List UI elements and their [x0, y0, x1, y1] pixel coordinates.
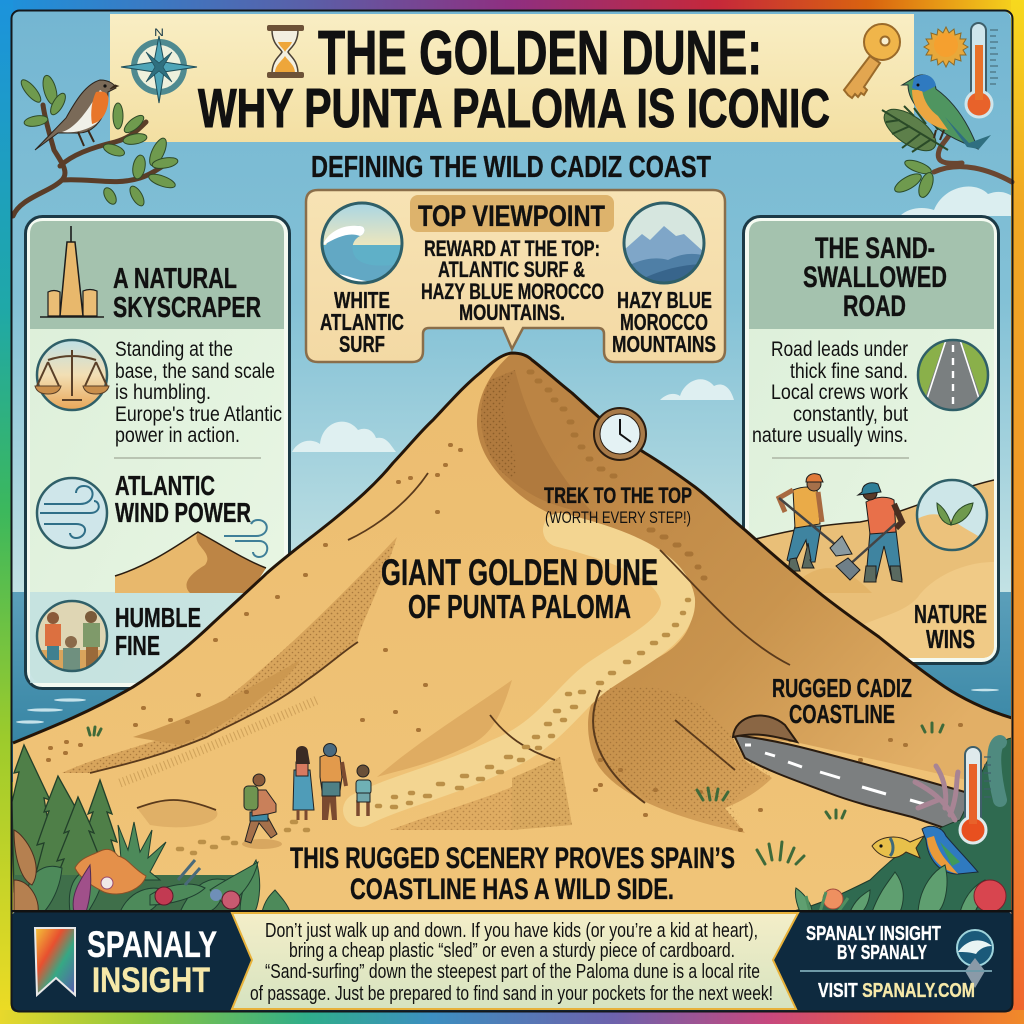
panel: the sand-swallowed road — [744, 216, 998, 664]
people on the dune — [242, 744, 371, 849]
tip text: bring a cheap plastic “sled” or even a sturdy piece of cardboard. — [289, 939, 735, 962]
icon: sand tower — [40, 226, 104, 317]
dune shadow face — [477, 353, 1012, 833]
small bird — [922, 826, 978, 874]
label: hazy blue morocco mountains: HAZY BLUE — [617, 287, 712, 313]
foliage left — [12, 745, 290, 912]
dune silhouette outline — [13, 353, 1012, 743]
tip scroll — [232, 913, 798, 1009]
text: standing at the base: Standing at the — [115, 337, 233, 361]
icon: mini dune — [115, 520, 267, 593]
tip text — [250, 919, 773, 1005]
pine trees — [12, 745, 119, 892]
ground plants — [14, 822, 290, 912]
tropical leaves — [14, 830, 38, 912]
tip text: of passage. Just be prepared to find sand in your pockets for the next week! — [250, 982, 773, 1005]
man — [320, 744, 346, 820]
seaweed — [994, 742, 1000, 800]
icon: sun — [924, 27, 968, 67]
icon: wave — [320, 203, 404, 294]
label: white atlantic surf: SURF — [339, 331, 385, 357]
panel: top viewpoint callout — [306, 190, 725, 362]
text: standing at the base — [115, 337, 282, 447]
label: hazy blue morocco mountains — [612, 287, 716, 357]
text: standing at the base: Europe's true Atlantic — [115, 402, 282, 426]
clock — [594, 408, 646, 460]
brand: by spanaly: SPANALY INSIGHT — [806, 923, 941, 945]
grass tufts — [88, 723, 943, 864]
text: road leads under: nature usually wins. — [752, 423, 908, 447]
label: rugged cadiz coastline: COASTLINE — [789, 699, 895, 729]
orange bush — [75, 849, 146, 894]
heading: humble fine: FINE — [115, 630, 160, 661]
text: road leads under: constantly, but — [793, 402, 908, 426]
text: reward at the top: REWARD AT THE TOP: — [424, 236, 600, 261]
icon: wind — [37, 478, 107, 548]
label: white atlantic surf: ATLANTIC — [320, 309, 404, 335]
icon: road — [918, 340, 988, 410]
heading: top viewpoint: TOP VIEWPOINT — [418, 200, 605, 233]
icon: key — [844, 24, 900, 98]
statement: rugged scenery: COASTLINE HAS A WILD SIDE. — [350, 873, 674, 906]
heading: the sand-swallowed road: ROAD — [843, 290, 906, 323]
heading: nature wins: WINS — [926, 626, 975, 654]
heading: nature wins: NATURE — [914, 601, 987, 629]
icon: mountains — [624, 203, 706, 288]
tip text: “Sand-surfing” down the steepest part of the Paloma dune is a local rite — [265, 960, 760, 983]
label: white atlantic surf: WHITE — [334, 287, 390, 313]
statement: rugged scenery: THIS RUGGED SCENERY PROVES SPAIN’S — [290, 842, 735, 875]
text: standing at the base: base, the sand scale — [115, 359, 275, 383]
sand behind workers — [752, 480, 994, 658]
right bird and branch — [877, 75, 1012, 199]
heading: a natural skyscraper — [113, 263, 261, 324]
flora — [795, 865, 1006, 912]
bottom banner — [11, 910, 1013, 1012]
logo ribbon — [35, 928, 75, 995]
scene background — [11, 10, 1013, 782]
title: THE GOLDEN DUNE: — [318, 19, 762, 88]
brand: spanaly insight — [87, 924, 217, 1000]
fish — [872, 836, 924, 858]
heading: the sand-swallowed road: THE SAND- — [815, 232, 935, 265]
light trail band — [360, 530, 678, 810]
mound of sand — [803, 568, 872, 593]
heading: a natural skyscraper: SKYSCRAPER — [113, 292, 261, 324]
woman — [293, 746, 314, 820]
brand: spanaly insight: INSIGHT — [92, 960, 210, 1000]
worker with shovel — [779, 474, 852, 571]
footprints trail — [529, 372, 705, 578]
label: rugged cadiz coastline — [772, 673, 912, 729]
label: trek to the top: TREK TO THE TOP — [544, 483, 692, 508]
label: white atlantic surf — [320, 287, 404, 357]
dune creases — [90, 473, 790, 810]
icon: compass: N — [154, 27, 164, 39]
link: visit spanaly.com: VISIT SPANALY.COM — [818, 980, 975, 1002]
title: WHY PUNTA PALOMA IS ICONIC — [198, 77, 830, 139]
giant dune — [13, 353, 1012, 912]
wind shaded patches — [62, 537, 772, 833]
label: giant golden dune: GIANT GOLDEN DUNE — [381, 552, 658, 593]
text: reward at the top: ATLANTIC SURF & — [438, 257, 585, 282]
icon: people — [37, 601, 107, 672]
left bird and branch — [13, 74, 179, 216]
heading: humble fine — [115, 602, 201, 661]
icon: compass — [121, 27, 197, 103]
heading: a natural skyscraper: A NATURAL — [113, 263, 237, 295]
coral — [915, 766, 958, 820]
icon: hourglass — [267, 25, 304, 78]
icon: sprout — [915, 480, 990, 554]
brand: spanaly insight: SPANALY — [87, 924, 217, 965]
child — [356, 765, 371, 816]
text: road leads under: Local crews work — [771, 380, 908, 404]
title — [198, 19, 830, 139]
text: road leads under — [752, 337, 908, 447]
label: trek to the top — [544, 483, 692, 527]
flowers — [73, 860, 240, 912]
text: road leads under: Road leads under — [771, 337, 908, 361]
label: giant golden dune — [381, 552, 658, 626]
text: reward at the top: HAZY BLUE MOROCCO — [421, 279, 604, 304]
label: rugged cadiz coastline: RUGGED CADIZ — [772, 673, 912, 703]
heading: the sand-swallowed road — [803, 232, 947, 323]
header banner — [110, 14, 914, 142]
heading: the sand-swallowed road: SWALLOWED — [803, 261, 947, 294]
label: hazy blue morocco mountains: MOUNTAINS — [612, 331, 716, 357]
statement: rugged scenery — [290, 842, 735, 906]
text: road leads under: thick fine sand. — [790, 359, 908, 383]
subtitle: DEFINING THE WILD CADIZ COAST — [311, 149, 711, 184]
text: reward at the top — [421, 236, 604, 325]
text: standing at the base: power in action. — [115, 423, 240, 447]
label: trek to the top: (WORTH EVERY STEP!) — [545, 508, 691, 527]
icon: scale — [35, 340, 109, 410]
heading: atlantic wind power — [115, 470, 251, 528]
brand: by spanaly: BY SPANALY — [837, 942, 927, 964]
coastal thermometer — [960, 747, 991, 843]
heading: atlantic wind power: ATLANTIC — [115, 470, 215, 501]
heading: atlantic wind power: WIND POWER — [115, 497, 251, 528]
text: standing at the base: is humbling. — [115, 380, 211, 404]
text: reward at the top: MOUNTAINS. — [459, 300, 565, 325]
front sand — [850, 562, 994, 658]
worker shoveling — [836, 483, 902, 582]
brand: by spanaly — [806, 923, 941, 964]
sand specks — [48, 445, 961, 830]
road and tunnel — [733, 716, 965, 835]
label: hazy blue morocco mountains: MOROCCO — [620, 309, 708, 335]
panel: a natural skyscraper — [26, 216, 290, 688]
icon: thermometer — [966, 23, 998, 117]
icon: wave logo — [957, 930, 993, 988]
label: giant golden dune: OF PUNTA PALOMA — [408, 589, 631, 626]
heading: humble fine: HUMBLE — [115, 602, 201, 633]
foliage right — [790, 738, 1012, 912]
tip text: Don’t just walk up and down. If you have kids (or you’re a kid at heart), — [265, 919, 758, 942]
hiker — [242, 774, 282, 849]
heading: nature wins — [914, 601, 987, 654]
